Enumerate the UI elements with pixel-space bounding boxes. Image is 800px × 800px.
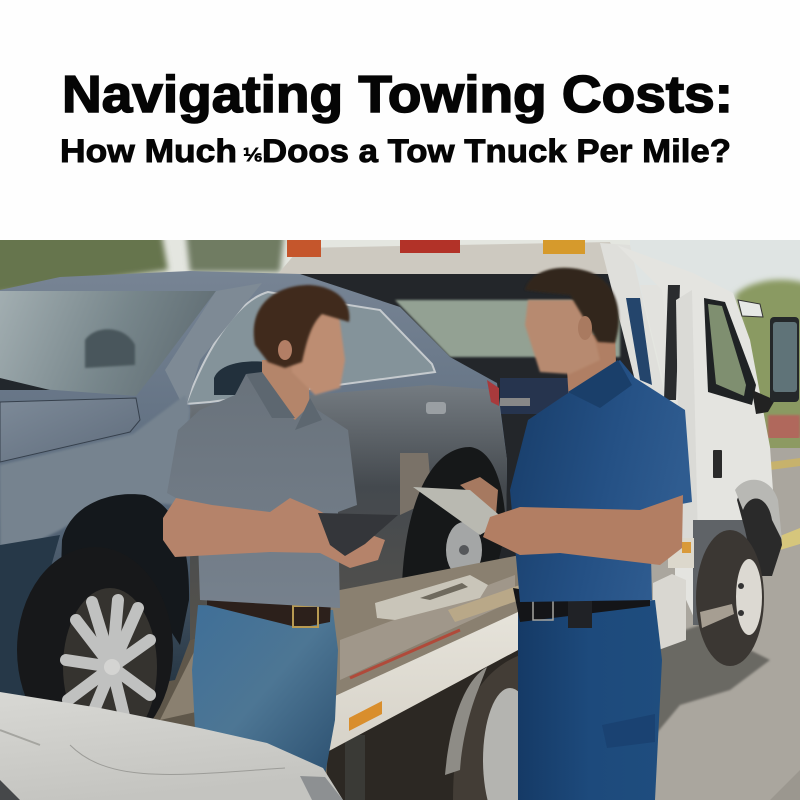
title: ⅙ [243, 145, 263, 165]
car front wheel arch [60, 494, 189, 645]
door handle [713, 450, 722, 478]
side windows [186, 292, 435, 404]
big side mirror [752, 317, 799, 414]
truck front wheel [696, 530, 764, 666]
hood [0, 398, 140, 462]
car front wheel [17, 557, 173, 718]
side mirror [214, 361, 265, 395]
cab lower body [693, 520, 750, 625]
hair [254, 285, 349, 368]
rear truck wheel [445, 656, 518, 800]
under-deck dark frame [327, 650, 518, 800]
car rear wheel [402, 447, 505, 578]
car rear door handle and tail light [426, 402, 446, 414]
title: Navigating Towing Costs: [62, 66, 733, 124]
deck surface [160, 555, 520, 722]
tow truck [278, 240, 799, 666]
man in grey polo [163, 285, 398, 775]
truck headboard top bar [280, 242, 610, 274]
face [292, 308, 345, 395]
face [525, 300, 600, 374]
navy polo shirt [510, 360, 692, 602]
front bumper dark [0, 535, 60, 658]
neck [262, 360, 310, 420]
forearm and hands [163, 498, 385, 568]
cab pillars and side [600, 243, 646, 385]
title: How Much [60, 133, 237, 169]
title: Doos a Tow Tnuck Per Mile? [262, 133, 731, 169]
grey car behind [0, 271, 507, 753]
title [60, 66, 733, 169]
road shadow [655, 625, 770, 735]
frame post [345, 735, 365, 800]
fuel tank [653, 574, 686, 652]
door panels [190, 385, 507, 640]
a-pillar [165, 283, 262, 410]
small mirror [738, 300, 763, 317]
silver car headlight [300, 776, 343, 800]
forearm and hand [483, 495, 683, 565]
orange warning sticker [349, 701, 382, 731]
car body [0, 271, 507, 700]
hand above the tablet [460, 477, 498, 515]
white bracket on the deck [375, 575, 488, 620]
ear [278, 340, 292, 360]
road and ground [153, 448, 800, 800]
tow truck flatbed [160, 555, 537, 800]
grey polo shirt [167, 374, 357, 608]
windshield [0, 291, 216, 396]
white side rail [327, 612, 518, 752]
truck rear window and dark cab back [300, 274, 634, 559]
background sky and trees [0, 240, 800, 448]
truck step [700, 604, 734, 628]
black utility belt [513, 588, 650, 628]
neck [565, 335, 618, 420]
door reflection [400, 453, 432, 515]
man in navy polo [413, 268, 692, 800]
belt and buckle [207, 596, 331, 628]
white title background [0, 0, 800, 240]
photo: two men beside a tow truck [0, 225, 800, 800]
navy work trousers [518, 600, 662, 800]
ear [578, 316, 592, 340]
light tablet [413, 487, 505, 535]
dark tablet [318, 513, 398, 556]
cargo pocket [602, 714, 655, 748]
short hair [525, 268, 619, 343]
silver car foreground [0, 692, 343, 800]
cab door window [704, 298, 756, 405]
jeans [192, 605, 338, 775]
